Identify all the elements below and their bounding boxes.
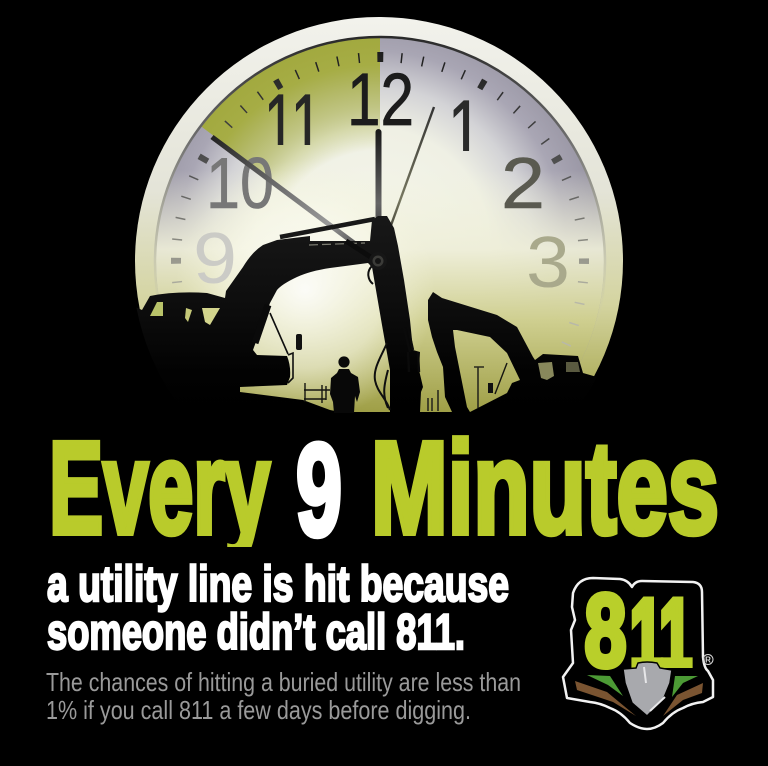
inner rim line [154,36,606,280]
clock numerals: 1 [448,83,482,177]
clock numerals: 2 [501,144,545,224]
logo number: 8 [584,573,626,688]
logo outline [563,578,713,729]
right soil [663,683,703,716]
811 logo [563,573,713,729]
registered mark: R [705,656,711,664]
clock numerals: 12 [347,58,414,141]
right cab windows [538,362,580,380]
body text [46,667,521,725]
registered mark [703,654,713,664]
clock rim [135,17,623,376]
clock numerals [196,72,566,288]
arm end cylinder [412,338,420,372]
right green [672,676,698,697]
title: Every [49,414,270,561]
boom cylinder [280,219,375,237]
shovel blade [623,662,672,716]
silhouette: right excavator [428,292,594,412]
body text: 1% if you call 811 a few days before digging. [46,695,471,725]
logo number [584,591,693,670]
clock numerals: 11 [264,77,322,171]
left green [587,675,623,696]
title [52,435,718,547]
logo number: 11 [630,579,692,695]
silhouette: left excavator [120,216,423,412]
left soil [575,681,636,716]
subheading [47,556,509,660]
right excavator body, boom and arm [428,292,594,412]
scaffold [304,383,330,403]
minute hand [210,135,356,241]
second hand [390,106,436,226]
clock hub [370,255,384,268]
arm hoses [368,266,390,410]
clock [135,17,623,412]
utility poles [428,367,484,411]
boom highlight dashes [309,243,365,245]
overlaid hand segments [345,239,369,254]
shovel highlights [644,667,665,711]
minute ticks [172,53,588,346]
clock numerals: 10 [206,144,274,224]
right cab mirror [488,383,493,393]
body text: The chances of hitting a buried utility are less than [46,667,521,697]
silhouette: worker [330,356,360,413]
subheading: a utility line is hit because [47,556,509,612]
clock face [156,38,604,408]
cab windows [150,302,220,325]
hour hand [376,129,382,218]
right strut [495,363,507,394]
green wedge from 10 to 12 [202,38,380,190]
hour ticks [171,52,589,264]
strut rod and mirror [270,313,293,383]
mirror [296,334,302,350]
boom hydraulic strut [255,305,268,343]
clock numerals: 9 [193,219,237,299]
subheading: someone didn’t call 811. [47,604,465,660]
title: 9 [296,416,342,563]
excavator body, boom and arm [120,216,423,412]
clock numerals: 3 [526,223,570,303]
